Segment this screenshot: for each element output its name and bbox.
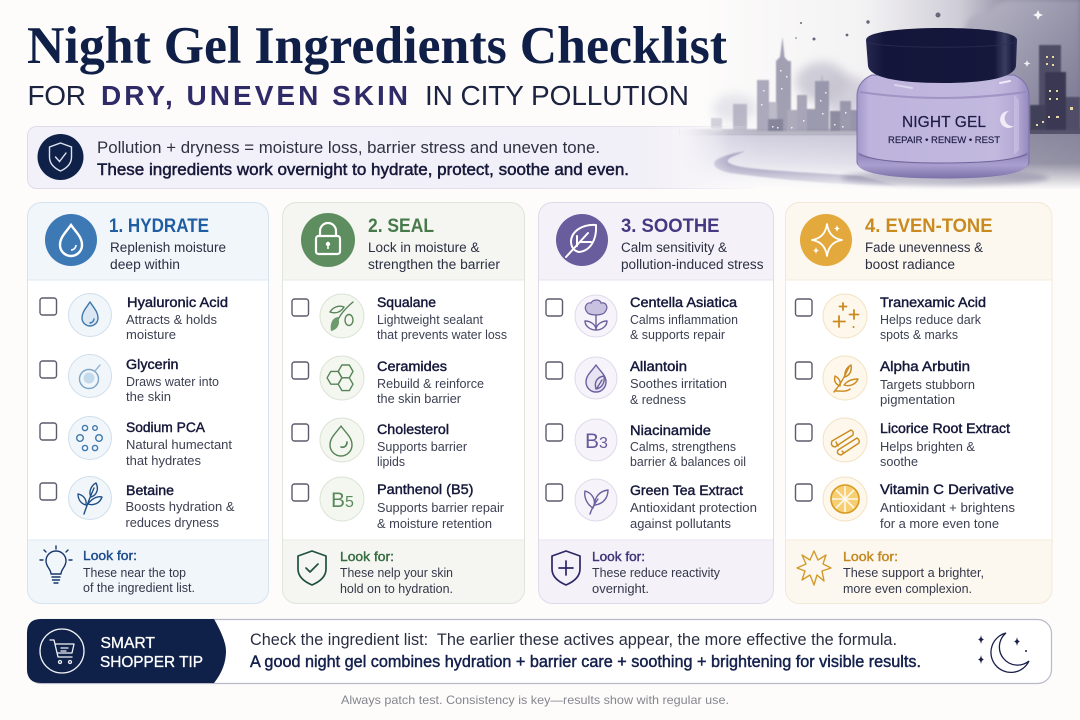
look for: even-tone <box>843 549 984 596</box>
item: tranexamic acid <box>796 294 986 342</box>
look for: even-tone: Look for: <box>843 549 898 564</box>
item: ceramides: Rebuild & reinforce <box>377 377 484 391</box>
item: niacinamide: Calms, strengthens <box>630 440 736 454</box>
icon: jar moon <box>1000 111 1014 128</box>
item: vitamin c derivative: for a more even tone <box>880 517 999 531</box>
jar label: night gel <box>888 114 1000 146</box>
item: panthenol <box>292 477 504 531</box>
heading: hydrate: 1. HYDRATE <box>109 216 209 237</box>
item: glycerin <box>40 354 219 404</box>
item: betaine: reduces dryness <box>126 516 219 530</box>
icon: shield plus <box>552 551 580 585</box>
item: glycerin: Glycerin <box>126 357 178 372</box>
item: squalane: Squalane <box>377 295 436 310</box>
heading: hydrate: Replenish moisture <box>110 240 226 255</box>
item: niacinamide: barrier & balances oil <box>630 455 746 469</box>
footnote: Always patch test. Consistency is key—results show with regular use. <box>341 693 729 707</box>
item: glycerin: the skin <box>126 390 171 404</box>
heading: even-tone: Fade unevenness & <box>865 240 983 255</box>
item: alpha arbutin <box>796 356 975 407</box>
heading: seal: Lock in moisture & <box>368 240 480 255</box>
item: tranexamic acid: Tranexamic Acid <box>880 295 986 310</box>
look for: seal: These nelp your skin <box>340 566 453 580</box>
item: panthenol: Supports barrier repair <box>377 501 504 515</box>
item: vitamin c derivative <box>796 477 1015 531</box>
tip text: A good night gel combines hydration + barrier care + soothing + brightening for visible results. <box>250 653 921 671</box>
item: niacinamide: Niacinamide <box>630 423 711 438</box>
item: squalane <box>292 294 507 342</box>
jar lid <box>866 28 1017 83</box>
item: panthenol: B5 <box>331 489 354 512</box>
heading: soothe: 3. SOOTHE <box>621 216 720 237</box>
look for: even-tone: These support a brighter, <box>843 566 984 580</box>
item: sodium pca: that hydrates <box>126 454 201 468</box>
item: panthenol: & moisture retention <box>377 517 492 531</box>
title: Night Gel Ingredients Checklist <box>27 17 727 75</box>
item: betaine <box>40 476 235 530</box>
jar label: night gel: NIGHT GEL <box>902 114 986 131</box>
jar label: night gel: REPAIR • RENEW • REST <box>888 135 1000 146</box>
icon: sparkles <box>800 214 852 266</box>
tip label: SHOPPER TIP <box>100 654 203 671</box>
jar body <box>857 75 1029 178</box>
item: allantoin <box>546 357 727 407</box>
item: tranexamic acid: spots & marks <box>880 328 958 342</box>
heading: even-tone <box>865 216 992 272</box>
look for: seal: hold on to hydration. <box>340 582 453 596</box>
intro text: These ingredients work overnight to hydrate, protect, soothe and even. <box>97 160 629 179</box>
look for: soothe: Look for: <box>592 549 645 564</box>
look for: soothe <box>592 549 721 596</box>
item: tranexamic acid: Helps reduce dark <box>880 313 982 327</box>
icon: shield check <box>298 551 326 585</box>
item: hyaluronic acid: Hyaluronic Acid <box>127 295 228 310</box>
item: centella asiatica: Calms inflammation <box>630 313 738 327</box>
item: niacinamide <box>546 419 746 469</box>
hero: city skyline and night gel jar <box>680 0 1080 190</box>
item: ceramides: Ceramides <box>377 359 447 374</box>
heading: seal <box>368 216 501 272</box>
item: hyaluronic acid <box>40 294 228 342</box>
item: sodium pca: Natural humectant <box>126 438 233 452</box>
item: cholesterol <box>292 418 467 469</box>
item: licorice root extract: Licorice Root Extract <box>880 421 1010 436</box>
heading: hydrate <box>109 216 226 272</box>
item: centella asiatica: & supports repair <box>630 328 725 342</box>
tip label: SMART <box>100 635 156 652</box>
heading: even-tone: boost radiance <box>865 257 955 272</box>
icon: light bulb <box>40 546 72 583</box>
look for: soothe: These reduce reactivity <box>592 566 721 580</box>
item: green tea extract: Antioxidant protection <box>630 501 757 515</box>
item: alpha arbutin: pigmentation <box>880 393 955 407</box>
tip label <box>100 635 203 671</box>
item: panthenol: Panthenol (B5) <box>377 482 474 497</box>
item: licorice root extract: Helps brighten & <box>880 440 976 454</box>
subtitle <box>28 80 689 111</box>
intro text <box>97 138 629 179</box>
icon: padlock <box>301 213 355 267</box>
item: squalane: that prevents water loss <box>377 328 507 342</box>
heading: seal: strengthen the barrier <box>368 257 501 272</box>
subtitle: DRY, UNEVEN SKIN <box>101 80 408 111</box>
item: betaine: Boosts hydration & <box>126 500 235 514</box>
smart shopper tip bar <box>27 619 1052 684</box>
look for: hydrate <box>83 548 195 595</box>
item: hyaluronic acid: Attracts & holds <box>126 313 217 327</box>
heading: soothe: pollution-induced stress <box>621 257 764 272</box>
item: allantoin: Soothes irritation <box>630 377 727 391</box>
panel: even-tone <box>786 202 1052 604</box>
item: allantoin: Allantoin <box>630 359 687 374</box>
look for: hydrate: of the ingredient list. <box>83 581 195 595</box>
item: allantoin: & redness <box>630 393 686 407</box>
tip badge <box>27 619 226 683</box>
intro text: Pollution + dryness = moisture loss, barrier stress and uneven tone. <box>97 138 600 157</box>
item: green tea extract <box>546 479 757 531</box>
look for: hydrate: These near the top <box>83 566 186 580</box>
panel: seal <box>282 202 524 604</box>
item: licorice root extract: soothe <box>880 455 918 469</box>
heading: soothe <box>621 216 764 272</box>
item: squalane: Lightweight sealant <box>377 313 484 327</box>
intro banner <box>28 126 760 188</box>
tip text <box>250 631 921 671</box>
heading: even-tone: 4. EVEN-TONE <box>865 216 992 237</box>
item: cholesterol: Cholesterol <box>377 422 449 437</box>
icon: leaf <box>556 214 608 266</box>
look for: seal <box>340 549 453 596</box>
icon: shopping cart <box>40 629 84 673</box>
item: centella asiatica <box>546 295 738 342</box>
look for: seal: Look for: <box>340 549 394 564</box>
item: betaine: Betaine <box>126 483 174 498</box>
heading: seal: 2. SEAL <box>368 216 434 237</box>
item: ceramides <box>292 356 484 406</box>
look for: hydrate: Look for: <box>83 548 137 563</box>
look for: even-tone: more even complexion. <box>843 582 972 596</box>
item: vitamin c derivative: Antioxidant + brightens <box>880 501 1015 515</box>
icon: moon and stars <box>978 633 1029 672</box>
item: ceramides: the skin barrier <box>377 392 461 406</box>
heading: hydrate: deep within <box>110 257 180 272</box>
tip text: Check the ingredient list: The earlier these actives appear, the more effective the formula. <box>250 631 897 649</box>
item: green tea extract: Green Tea Extract <box>630 483 743 498</box>
item: glycerin: Draws water into <box>126 375 219 389</box>
heading: soothe: Calm sensitivity & <box>621 240 727 255</box>
panel: hydrate <box>28 202 268 604</box>
item: licorice root extract <box>796 418 1010 469</box>
icon: shield <box>38 134 84 180</box>
item: cholesterol: lipids <box>377 455 405 469</box>
icon: starburst <box>797 551 831 585</box>
item: vitamin c derivative: Vitamin C Derivative <box>880 482 1014 497</box>
item: sodium pca <box>40 416 233 468</box>
subtitle: IN CITY POLLUTION <box>425 80 689 111</box>
icon: water drop <box>45 214 97 266</box>
item: niacinamide: B3 <box>585 430 608 453</box>
item: alpha arbutin: Alpha Arbutin <box>880 359 970 374</box>
item: cholesterol: Supports barrier <box>377 440 467 454</box>
item: alpha arbutin: Targets stubborn <box>880 378 975 392</box>
look for: soothe: overnight. <box>592 582 649 596</box>
subtitle: FOR <box>28 80 86 111</box>
item: hyaluronic acid: moisture <box>126 328 176 342</box>
item: green tea extract: against pollutants <box>630 517 731 531</box>
panel: soothe <box>538 202 774 604</box>
item: sodium pca: Sodium PCA <box>126 420 205 435</box>
item: centella asiatica: Centella Asiatica <box>630 295 738 310</box>
